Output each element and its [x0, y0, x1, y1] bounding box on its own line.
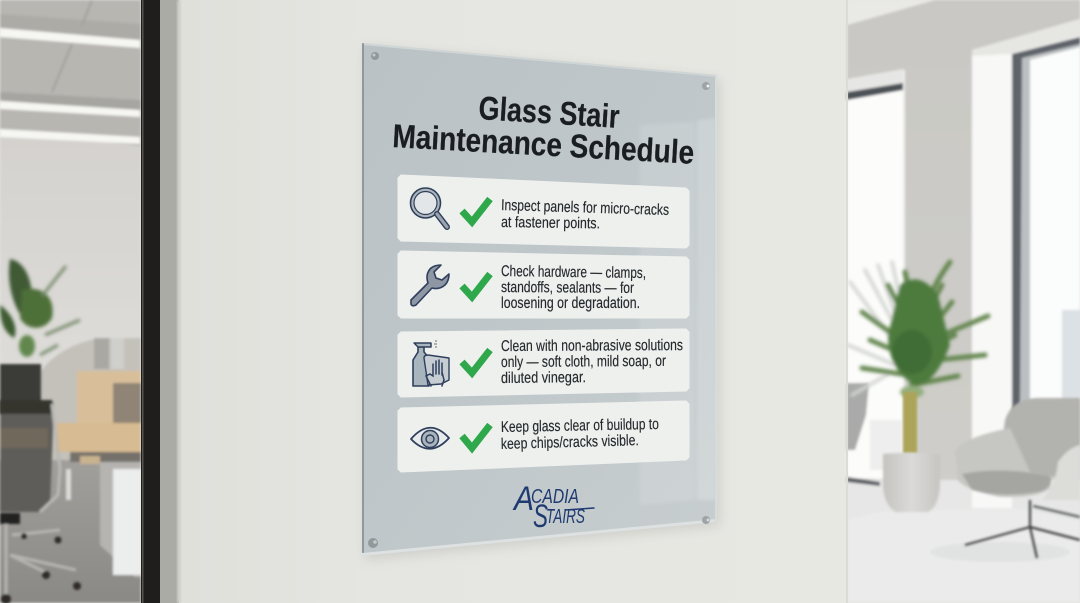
- icon: spray bottle and cloth: [413, 341, 449, 386]
- text: hardware: [501, 263, 646, 312]
- plant pot: [883, 452, 940, 512]
- title: [392, 89, 695, 171]
- text: inspect: at fastener points.: [501, 214, 600, 232]
- ceiling: [847, 0, 935, 25]
- back low partition: [40, 338, 141, 460]
- office chair: [0, 400, 81, 603]
- left office view through glass: [0, 0, 141, 603]
- text: inspect: Inspect panels for micro-cracks: [501, 197, 669, 219]
- icon: eye: [411, 428, 449, 449]
- wood cabinet: [77, 371, 141, 423]
- palm plant: [848, 262, 988, 398]
- text: clean: only — soft cloth, mild soap, or: [501, 353, 666, 371]
- icon: green check: [462, 350, 490, 373]
- text: inspect: [501, 197, 669, 232]
- left plant: [0, 259, 80, 357]
- black door frame: [141, 0, 160, 603]
- card: inspect panels: [398, 175, 689, 248]
- ceiling lights: [0, 28, 140, 144]
- dark monitor: [0, 364, 41, 414]
- logo: Acadia Stairs: TAIRS: [546, 506, 585, 528]
- text: hardware: loosening or degradation.: [501, 295, 640, 312]
- card: check hardware: [398, 251, 689, 318]
- window 2 frame and glass: [1012, 37, 1080, 412]
- text: clean: Clean with non-abrasive solutions: [501, 337, 683, 355]
- deep white reveal: [972, 19, 1080, 508]
- text: hardware: standoffs, sealants — for: [501, 279, 634, 297]
- panel reflections: [640, 122, 695, 505]
- text: hardware: Check hardware — clamps,: [501, 263, 646, 282]
- feature wall: [160, 0, 848, 603]
- chair legs: [965, 500, 1080, 558]
- text: clean: [501, 337, 683, 387]
- plant trunk: [903, 392, 917, 454]
- shelf ornaments: [94, 338, 109, 369]
- floor: [0, 460, 141, 603]
- standoffs: [371, 52, 379, 60]
- card: clean: [398, 329, 689, 397]
- right office view: [847, 0, 1080, 603]
- title: Glass Stair: [478, 89, 621, 135]
- logo: Acadia Stairs: CADIA: [531, 486, 579, 508]
- icon: green check: [462, 274, 490, 297]
- icon: magnifying glass: [410, 188, 447, 227]
- back chair: [847, 383, 869, 450]
- text: keep clear: Keep glass clear of buildup to: [501, 416, 659, 436]
- drawer unit: [100, 462, 141, 577]
- desk: [56, 423, 141, 452]
- window 1: [847, 90, 903, 480]
- logo: Acadia Stairs: A: [512, 480, 534, 518]
- right wall edge: [846, 0, 848, 603]
- text: keep clear: [501, 416, 659, 453]
- text: keep clear: keep chips/cracks visible.: [501, 432, 639, 453]
- icon: green check: [462, 199, 490, 222]
- logo: Acadia Stairs: [512, 480, 594, 534]
- title: Maintenance Schedule: [392, 117, 695, 171]
- icon: green check: [462, 425, 490, 448]
- text: clean: diluted vinegar.: [501, 369, 586, 387]
- wall shadow behind panel: [365, 47, 720, 560]
- logo: Acadia Stairs: S: [533, 498, 548, 534]
- icon: wrench: [411, 265, 449, 306]
- ceiling: [0, 0, 141, 146]
- card: keep clear: [398, 401, 689, 472]
- glass sign panel: [362, 43, 717, 556]
- lounge chair: [955, 398, 1080, 500]
- floor: [847, 480, 1080, 603]
